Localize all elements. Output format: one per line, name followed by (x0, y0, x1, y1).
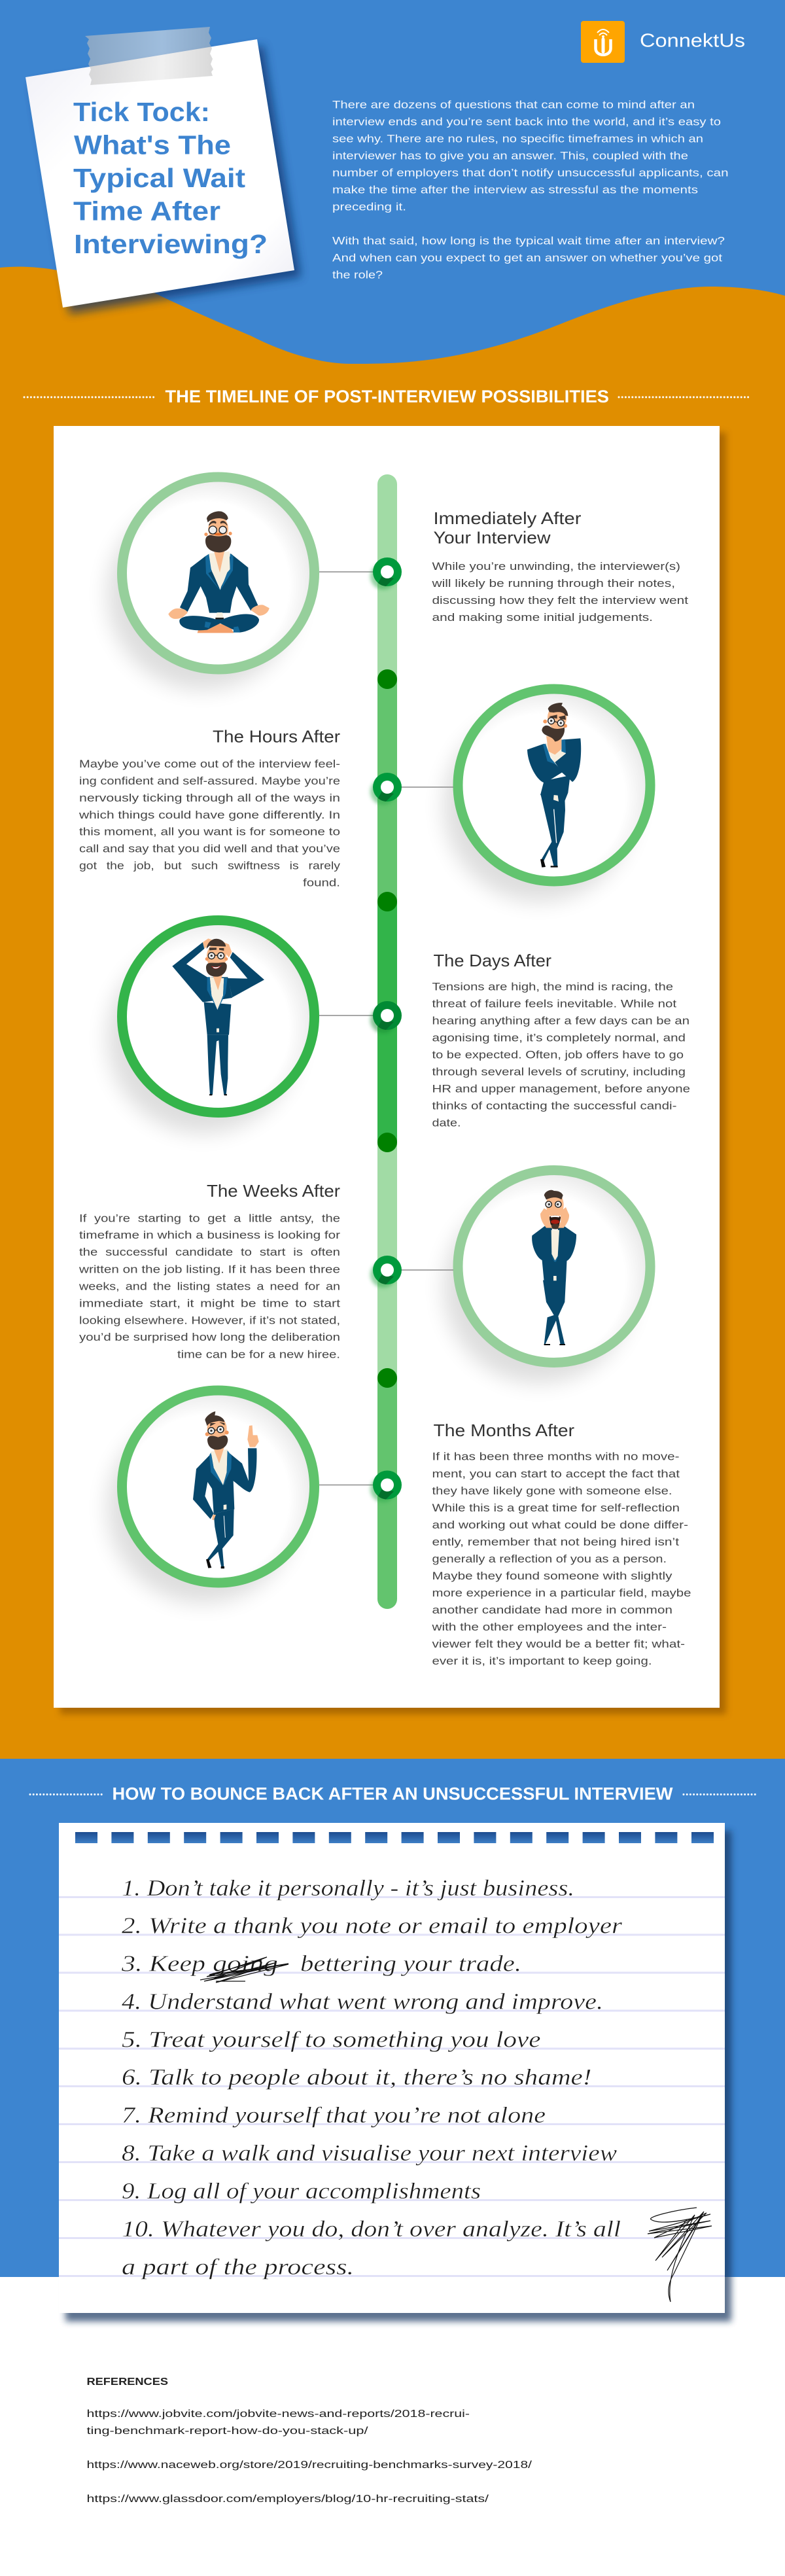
references: ting-benchmark-report-how-do-you-stack-up/ (86, 2426, 368, 2437)
intro text: interviewer has to give you an answer. This, coupled with the (332, 149, 688, 162)
connector (400, 1269, 453, 1271)
text: weeks after: The Weeks After (207, 1181, 340, 1201)
text: hours after: ing confident and self-assured. Maybe you’re (79, 775, 340, 787)
text: months after: another candidate had more in common (432, 1604, 672, 1616)
connector (400, 786, 453, 788)
text: months after: The Months After (433, 1420, 574, 1440)
text: months after: ment, you can start to accept the fact that (432, 1468, 680, 1480)
text: immediately after: discussing how they felt the interview went (432, 595, 689, 607)
text: weeks after: written on the job listing. If it has been three (78, 1264, 340, 1276)
text: months after: While this is a great time for self-reflection (432, 1502, 680, 1514)
text: immediately after: and making some initial judgements. (432, 612, 653, 624)
handwritten list (121, 1875, 622, 2280)
references: https://www.jobvite.com/jobvite-news-and-reports/2018-recrui- (86, 2408, 470, 2420)
timeline node (370, 1001, 402, 1033)
text: days after: agonising time, it’s completely normal, and (432, 1032, 686, 1044)
text: immediately after: Immediately After (433, 508, 582, 528)
text: months after: ever it is, it’s important to keep going. (432, 1655, 652, 1667)
text: days after: to be expected. Often, job offers have to go (432, 1050, 684, 1061)
heading: timeline: THE TIMELINE OF POST-INTERVIEW POSSIBILITIES (165, 387, 609, 406)
text: hours after: this moment, all you want is for someone to (79, 826, 340, 838)
connector (319, 571, 374, 573)
text: hours after: nervously ticking through all of the ways in (79, 792, 340, 804)
text: immediately after: While you’re unwinding, the interviewer(s) (432, 561, 680, 573)
text: immediately after: will likely be running through their notes, (431, 578, 675, 590)
text: hours after: got the job, but such swiftness is rarely (79, 860, 341, 872)
text: months after: more experience in a particular field, maybe (432, 1587, 691, 1599)
handwritten list: a part of the process. (122, 2254, 354, 2280)
text: hours after: found. (303, 877, 340, 889)
text: months after: ently, remember that not being hired isn’t (432, 1536, 680, 1548)
tape (85, 27, 213, 85)
orange wave background (0, 267, 785, 1759)
handwritten list: bettering your trade. (300, 1951, 521, 1976)
text: days after (432, 951, 690, 1129)
handwritten list: 8. Take a walk and visualise your next interview (122, 2140, 618, 2166)
panel: notepad (59, 1823, 731, 2321)
text: months after: and working out what could be done differ- (432, 1519, 688, 1531)
portrait ring (107, 1390, 314, 1603)
text: months after: Maybe they found someone with slightly (432, 1570, 672, 1582)
figure: screaming man (532, 1190, 576, 1345)
references: REFERENCES (86, 2376, 168, 2388)
logo (581, 21, 745, 63)
handwritten list: 9. Log all of your accomplishments (122, 2178, 481, 2204)
handwritten list: 3. Keep (121, 1951, 205, 1976)
text: weeks after: looking elsewhere. However, if it’s not stated, (79, 1315, 340, 1327)
timeline node (370, 773, 402, 805)
note card with title (26, 27, 301, 314)
text: weeks after: the successful candidate to start is often (79, 1246, 340, 1258)
step 5: months after (107, 1390, 691, 1667)
intro text: interview ends and you’re sent back into the world, and it’s easy to (332, 115, 721, 128)
text: days after: HR and upper management, before anyone (432, 1084, 690, 1095)
handwritten list: 2. Write a thank you note or email to employer (122, 1913, 622, 1938)
intro text: the role? (332, 268, 383, 281)
intro text (332, 98, 729, 281)
text: days after: thinks of contacting the successful candi- (432, 1101, 676, 1112)
timeline node (370, 1471, 402, 1502)
figure: thinking man (527, 703, 581, 868)
text: weeks after: time can be for a new hiree. (177, 1349, 340, 1361)
text: hours after: call and say that you did well and that you’ve (79, 843, 340, 855)
figure: meditating man (168, 511, 270, 633)
text: days after: Tensions are high, the mind is racing, the (432, 981, 673, 993)
text: hours after: which things could have gone differently. In (78, 809, 340, 821)
text: days after: through several levels of scrutiny, including (432, 1067, 686, 1078)
text: months after: If it has been three months with no move- (432, 1451, 679, 1463)
text: weeks after (78, 1181, 341, 1361)
blue tips section background (0, 1759, 785, 2277)
references: https://www.naceweb.org/store/2019/recruiting-benchmarks-survey-2018/ (86, 2460, 532, 2471)
intro text: see why. There are no rules, no specific timeframes in which an (332, 132, 703, 145)
handwritten list: going (213, 1951, 278, 1976)
text: months after: they have likely gone with someone else. (432, 1485, 672, 1497)
text: months after: with the other employees and the inter- (431, 1621, 667, 1633)
logo: ConnektUs (640, 30, 745, 51)
step 2: hours after (78, 689, 650, 902)
portrait ring (444, 689, 650, 902)
portrait ring (107, 477, 314, 690)
text: immediately after: Your Interview (433, 527, 551, 547)
text: months after (431, 1420, 691, 1667)
intro text: number of employers that don’t notify unsuccessful applicants, can (332, 166, 729, 179)
signature scribble (648, 2208, 712, 2302)
text: weeks after: If you’re starting to get a little antsy, the (79, 1213, 340, 1225)
text: weeks after: you’d be surprised how long the deliberation (79, 1332, 340, 1343)
step 3: days after (107, 920, 690, 1133)
step 4: weeks after (78, 1170, 650, 1383)
text: days after: threat of failure feels inevitable. While not (432, 998, 677, 1010)
timeline node (370, 1256, 402, 1288)
handwritten list: 10. Whatever you do, don’t over analyze. It’s all (122, 2216, 621, 2242)
text: hours after (78, 726, 341, 889)
handwritten list: 6. Talk to people about it, there’s no shame! (122, 2064, 591, 2090)
handwritten list: 1. Don’t take it personally - it’s just business. (122, 1875, 574, 1901)
text: days after: date. (432, 1118, 461, 1129)
text: months after: viewer felt they would be a better fit; what- (432, 1638, 685, 1650)
notepad punch holes (75, 1832, 714, 1843)
timeline node (370, 557, 402, 590)
title: Time After (73, 196, 220, 226)
intro text: And when can you expect to get an answer on whether you’ve got (332, 251, 722, 264)
portrait ring (444, 1170, 650, 1383)
text: hours after: Maybe you’ve come out of the interview feel- (79, 758, 340, 770)
title: Typical Wait (73, 163, 245, 193)
panel: timeline card (54, 426, 726, 1714)
title: What's The (74, 130, 231, 160)
heading: bounce back: HOW TO BOUNCE BACK AFTER AN UNSUCCESSFUL INTERVIEW (113, 1784, 672, 1803)
references (86, 2376, 532, 2505)
text: days after: The Days After (433, 951, 551, 970)
intro text: There are dozens of questions that can come to mind after an (332, 98, 695, 111)
text: hours after: The Hours After (213, 726, 340, 746)
notepad ruled lines (59, 1896, 725, 2277)
title: Tick Tock: (73, 97, 210, 127)
portrait ring (107, 920, 314, 1133)
text: months after: generally a reflection of you as a person. (432, 1553, 667, 1565)
timeline bar (377, 474, 397, 1609)
handwritten list: 4. Understand what went wrong and improve. (122, 1989, 603, 2014)
handwritten list: 5. Treat yourself to something you love (122, 2027, 540, 2052)
text: days after: hearing anything after a few days can be an (432, 1015, 689, 1027)
references: https://www.glassdoor.com/employers/blog/10-hr-recruiting-stats/ (86, 2494, 489, 2505)
blue header background (0, 0, 785, 393)
intro text: make the time after the interview as stressful as the moments (332, 183, 698, 196)
figure: pointing man (193, 1411, 259, 1568)
text: weeks after: immediate start, it might be time to start (79, 1298, 341, 1310)
scribble over word (200, 1957, 288, 1983)
connector (319, 1484, 374, 1485)
text: weeks after: timeframe in which a business is looking for (79, 1229, 341, 1241)
title: Interviewing? (74, 229, 268, 259)
intro text: With that said, how long is the typical wait time after an interview? (332, 234, 725, 247)
figure: stressed man (172, 938, 264, 1095)
title (73, 97, 268, 259)
handwritten list: 7. Remind yourself that you’re not alone (122, 2102, 546, 2128)
step 1: immediately after (107, 477, 689, 690)
text: weeks after: weeks, and the listing states a need for an (78, 1281, 340, 1293)
connector (319, 1015, 374, 1016)
intro text: preceding it. (332, 200, 406, 213)
text: immediately after (431, 508, 689, 624)
